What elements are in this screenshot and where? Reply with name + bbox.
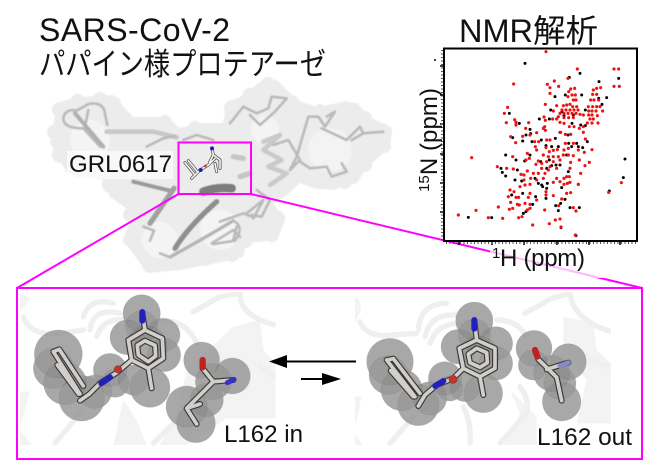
title: SARS-CoV-2 papain-like protease: SARS-CoV-2: [39, 12, 230, 48]
protein surface: [47, 77, 392, 273]
title: SARS-CoV-2 papain-like protease: パパイン様プロテアーゼ: [39, 47, 326, 82]
x axis label: 1H (ppm): H (ppm): [500, 245, 585, 272]
background protein ribbons, left view: [20, 293, 276, 445]
GRL0617 spheres, right view: [367, 302, 513, 426]
GRL0617 label: GRL0617: [69, 151, 172, 178]
title: SARS-CoV-2 papain-like protease: [39, 12, 326, 82]
ribbons: right domain: [212, 97, 383, 243]
magenta selection box on protein: [178, 142, 251, 194]
black peaks: reference spectrum: [435, 60, 625, 236]
ribbons: left and bottom domains: [63, 103, 263, 257]
protein surface and ribbon structure: [47, 77, 392, 273]
title: NMR analysis: NMR解析: [459, 13, 598, 49]
molecular view: L162 out: [355, 293, 611, 445]
L162 spheres, in: [166, 342, 250, 443]
background protein ribbons, right view: [355, 293, 611, 445]
zoom connector lines: [17, 194, 642, 288]
molecular view: L162 in: [20, 293, 276, 445]
L162 spheres, out: [516, 330, 586, 421]
plot frame and axis ticks: [440, 48, 637, 245]
arrow: exchange toward L162 out: [301, 373, 341, 385]
panel frame: [17, 288, 642, 459]
x axis label: 1H (ppm): 1: [492, 245, 500, 262]
panel: L162 conformational exchange: [17, 288, 642, 459]
y axis label: 15N (ppm): N (ppm): [416, 88, 443, 175]
ligand in protein pocket: [185, 146, 220, 178]
GRL0617 and L162 sticks, out: [387, 320, 568, 406]
label: L162 out: L162 out: [537, 424, 632, 451]
GRL0617 spheres, left view: [33, 295, 181, 421]
NMR spectrum chart: [435, 48, 637, 245]
label: L162 in: L162 in: [224, 421, 303, 448]
x axis label: 1H (ppm): [490, 245, 605, 278]
GRL0617 and L162 sticks, in: [53, 312, 234, 424]
red peaks: ligand-bound spectrum: [458, 52, 621, 235]
arrow: exchange toward L162 in: [269, 355, 356, 368]
y axis label: 15N (ppm): 15: [416, 175, 433, 192]
